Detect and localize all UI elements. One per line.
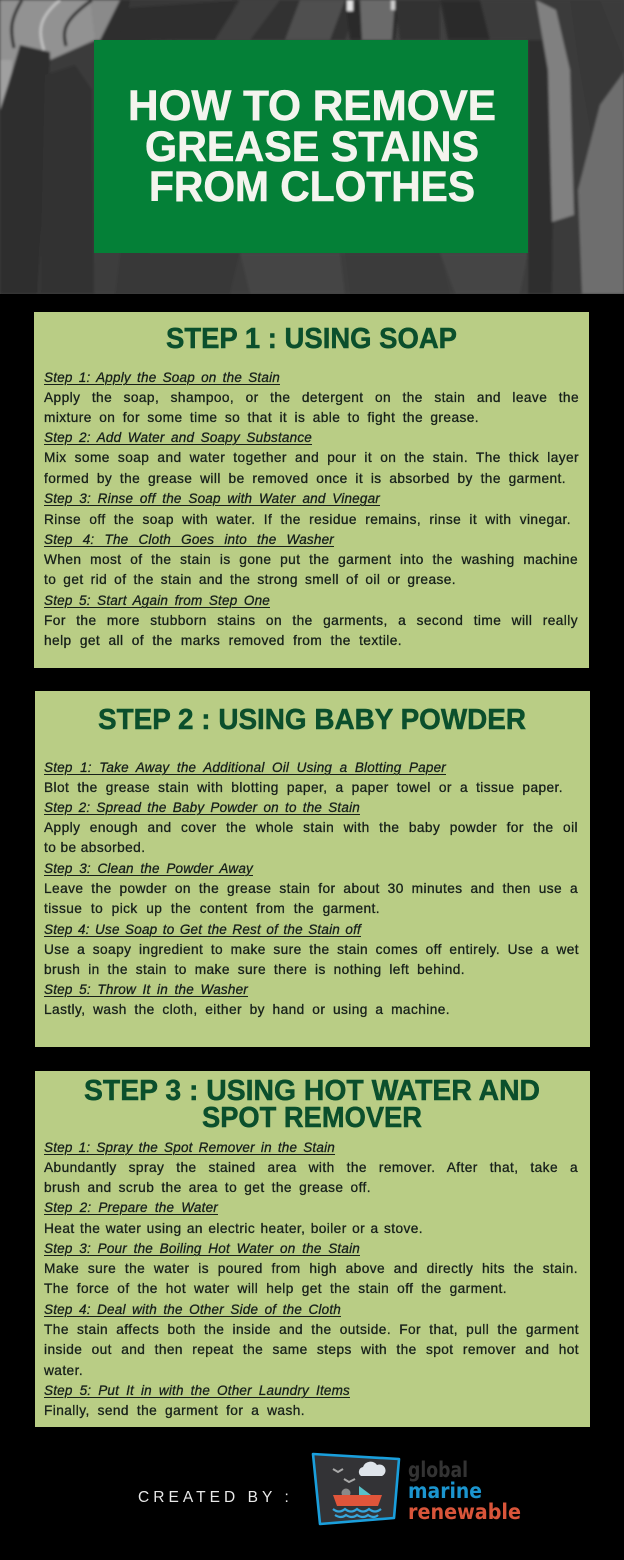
step 1 instructions: formed by the grease will be removed once it is absorbed by the garment. <box>44 471 566 486</box>
hero photo: clothes on a rack <box>0 0 624 294</box>
logo wordmark: renewable <box>408 1500 521 1524</box>
logo wordmark <box>408 1458 521 1524</box>
step 3 instructions: The force of the hot water will help get the stain off the garment. <box>44 1281 507 1296</box>
step 1 instructions: Step 2: Add Water and Soapy Substance <box>44 430 312 445</box>
step 3 instructions: Make sure the water is poured from high above and directly hits the stain. <box>44 1261 578 1276</box>
step 1 instructions: Apply the soap, shampoo, or the detergent on the stain and leave the <box>44 390 579 405</box>
step 1 instructions: mixture on for some time so that it is able to fight the grease. <box>44 410 479 425</box>
step 2 instructions: tissue to pick up the content from the garment. <box>44 901 380 916</box>
step 1 instructions: Mix some soap and water together and pour it on the stain. The thick layer <box>44 450 579 465</box>
step 3 instructions: water. <box>44 1363 83 1378</box>
step 2 instructions: Leave the powder on the grease stain for about 30 minutes and then use a <box>44 881 578 896</box>
step 1 instructions: Step 3: Rinse off the Soap with Water and Vinegar <box>44 491 380 506</box>
created by label: CREATED BY : <box>138 1489 293 1506</box>
step 2 instructions: Step 4: Use Soap to Get the Rest of the Stain off <box>44 922 361 937</box>
panel: step 3 using hot water and spot remover <box>35 1071 590 1427</box>
step 3 instructions: Step 2: Prepare the Water <box>44 1200 218 1215</box>
step 3 instructions: inside out and then repeat the same steps with the spot remover and hot <box>44 1342 579 1357</box>
step 2 instructions: Step 5: Throw It in the Washer <box>44 982 248 997</box>
step 2 instructions: Use a soapy ingredient to make sure the stain comes off entirely. Use a wet <box>44 942 579 957</box>
step 1 instructions: When most of the stain is gone put the garment into the washing machine <box>44 552 578 567</box>
logo wordmark: global <box>408 1458 468 1482</box>
title text <box>128 82 496 211</box>
step 2 instructions: to be absorbed. <box>44 840 145 855</box>
heading: step 3: SPOT REMOVER <box>202 1102 422 1134</box>
step 3 instructions: The stain affects both the inside and the outside. For that, pull the garment <box>44 1322 579 1337</box>
heading: step 3: STEP 3 : USING HOT WATER AND <box>84 1075 540 1107</box>
step 2 instructions: Step 1: Take Away the Additional Oil Using a Blotting Paper <box>44 760 446 775</box>
step 2 instructions: Lastly, wash the cloth, either by hand or using a machine. <box>44 1002 450 1017</box>
step 3 instructions: Finally, send the garment for a wash. <box>44 1403 305 1418</box>
step 1 instructions: Step 5: Start Again from Step One <box>44 593 270 608</box>
step 2 instructions: Step 2: Spread the Baby Powder on to the Stain <box>44 800 360 815</box>
step 3 instructions: brush and scrub the area to get the grease off. <box>44 1180 371 1195</box>
step 3 instructions <box>44 1140 579 1418</box>
title text: HOW TO REMOVE <box>128 82 496 130</box>
step 1 instructions: Rinse off the soap with water. If the residue remains, rinse it with vinegar. <box>44 512 571 527</box>
logo wordmark: marine <box>408 1479 482 1503</box>
heading: step 1: STEP 1 : USING SOAP <box>166 323 457 355</box>
step 3 instructions: Heat the water using an electric heater, boiler or a stove. <box>44 1221 423 1236</box>
heading: step 2: STEP 2 : USING BABY POWDER <box>98 704 526 736</box>
step 2 instructions <box>44 760 579 1018</box>
step 2 instructions: Blot the grease stain with blotting paper, a paper towel or a tissue paper. <box>44 780 563 795</box>
step 1 instructions: to get rid of the stain and the strong smell of oil or grease. <box>44 572 456 587</box>
step 2 instructions: brush in the stain to make sure there is nothing left behind. <box>44 962 465 977</box>
step 3 instructions: Step 5: Put It in with the Other Laundry Items <box>44 1383 350 1398</box>
step 1 instructions: For the more stubborn stains on the garments, a second time will really <box>44 613 578 628</box>
step 1 instructions: Step 1: Apply the Soap on the Stain <box>44 370 280 385</box>
step 1 instructions <box>44 370 579 648</box>
title banner <box>94 40 528 253</box>
step 2 instructions: Apply enough and cover the whole stain with the baby powder for the oil <box>44 820 578 835</box>
heading: step 3 <box>84 1075 540 1134</box>
title text: GREASE STAINS <box>145 123 479 171</box>
panel: step 2 using baby powder <box>35 691 590 1047</box>
panel: step 1 using soap <box>34 312 589 668</box>
step 3 instructions: Step 3: Pour the Boiling Hot Water on the Stain <box>44 1241 360 1256</box>
step 1 instructions: Step 4: The Cloth Goes into the Washer <box>44 532 334 547</box>
title text: FROM CLOTHES <box>149 163 475 211</box>
step 2 instructions: Step 3: Clean the Powder Away <box>44 861 253 876</box>
logo: global marine renewable <box>312 1452 521 1526</box>
step 3 instructions: Step 1: Spray the Spot Remover in the Stain <box>44 1140 335 1155</box>
logo badge <box>313 1454 399 1524</box>
step 3 instructions: Step 4: Deal with the Other Side of the Cloth <box>44 1302 341 1317</box>
step 3 instructions: Abundantly spray the stained area with the remover. After that, take a <box>44 1160 578 1175</box>
step 1 instructions: help get all of the marks removed from the textile. <box>44 633 402 648</box>
